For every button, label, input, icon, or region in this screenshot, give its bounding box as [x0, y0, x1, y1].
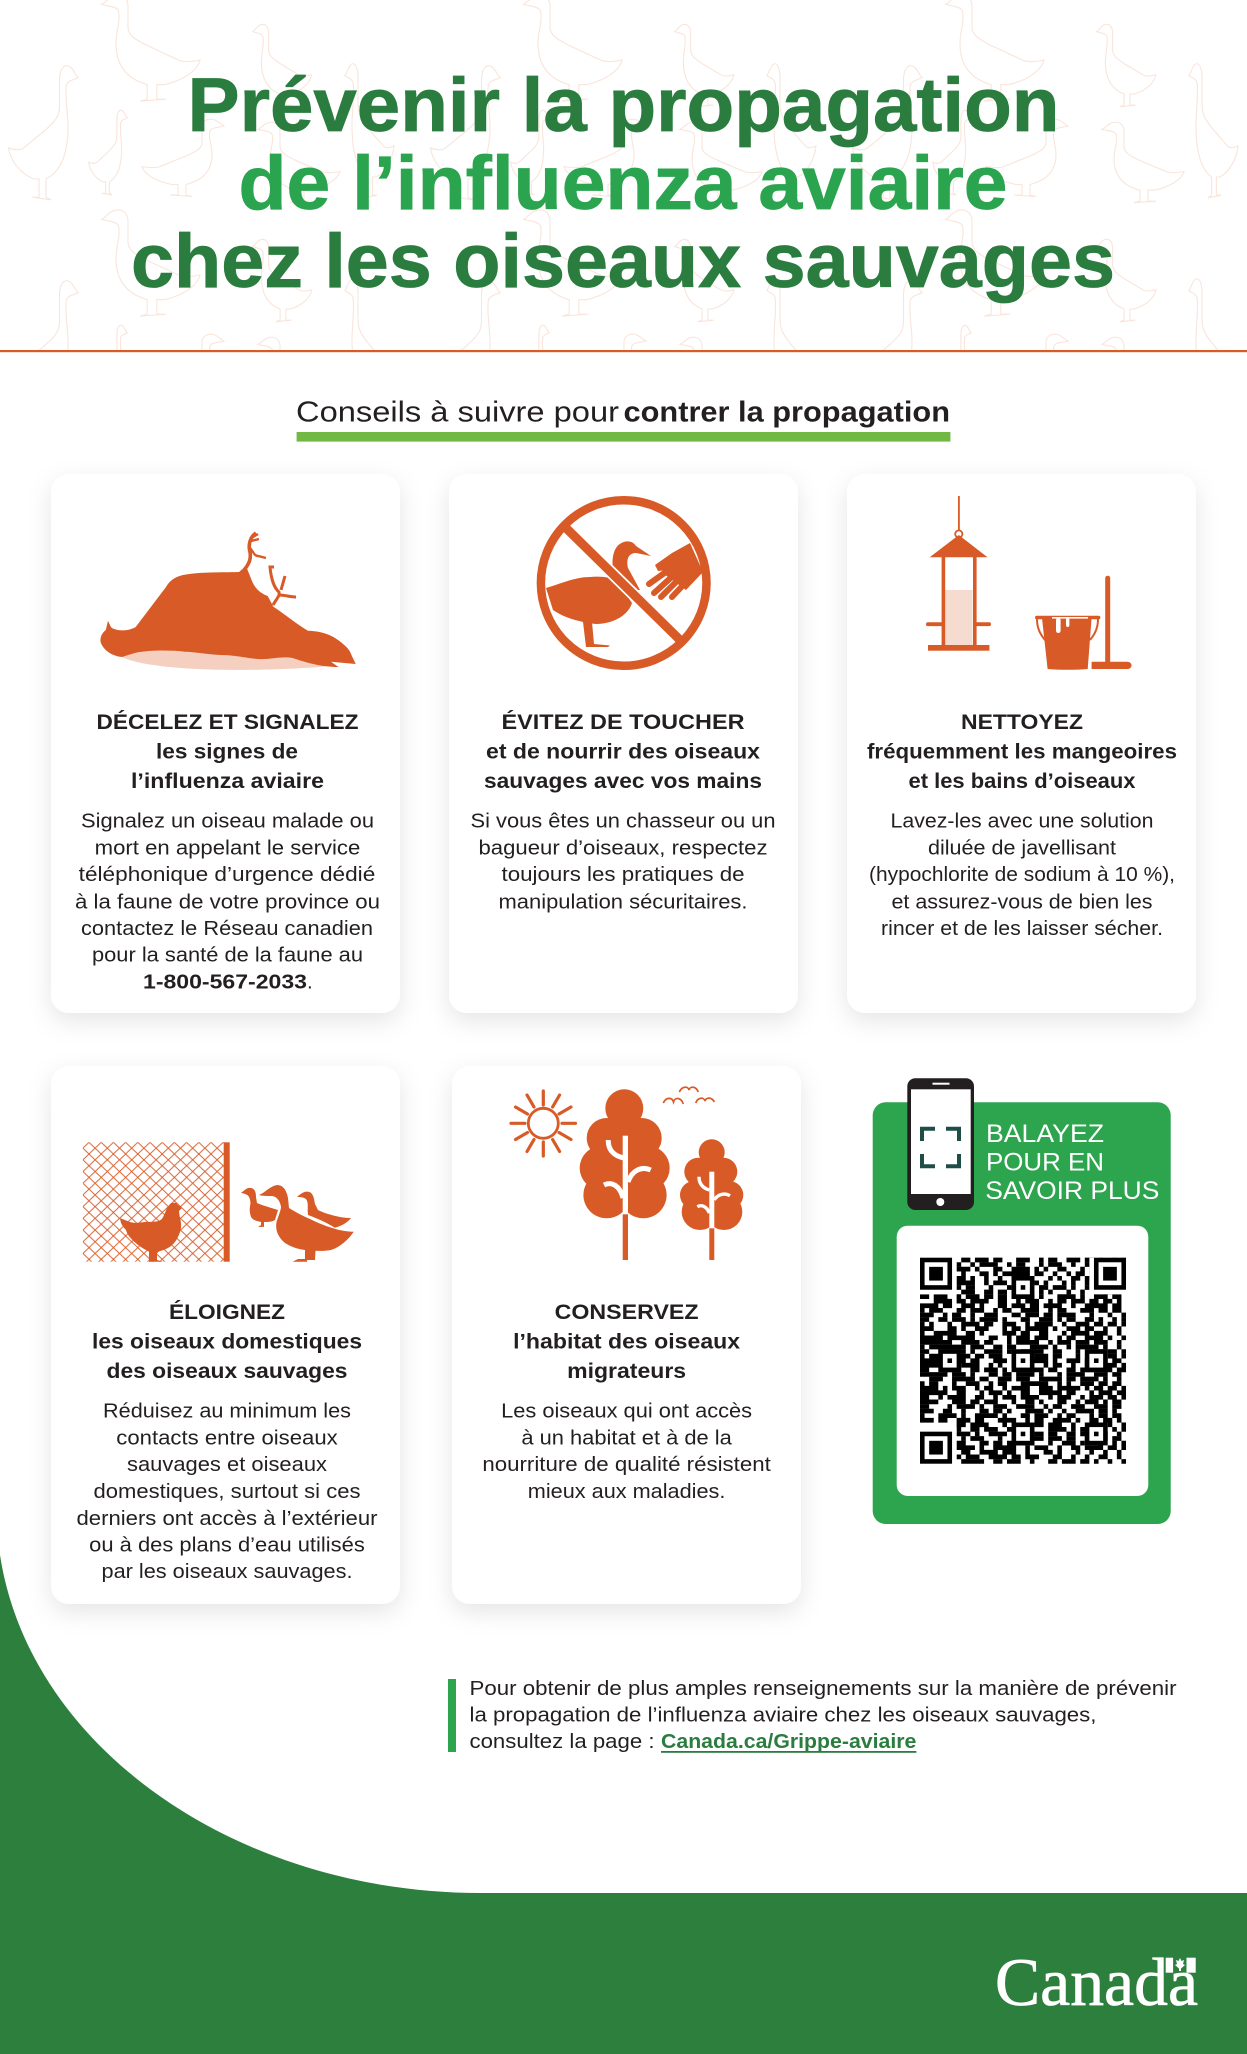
body text: décelez et signalez: .	[307, 970, 313, 993]
heading: éloignez	[92, 1299, 362, 1383]
icon: sun	[511, 1091, 576, 1156]
body text: éloignez: sauvages et oiseaux	[127, 1453, 328, 1476]
body text: éloignez: contacts entre oiseaux	[116, 1426, 339, 1449]
body text: évitez de toucher	[470, 810, 776, 913]
heading: évitez de toucher: ÉVITEZ DE TOUCHER	[502, 709, 745, 734]
heading: conservez: CONSERVEZ	[555, 1300, 699, 1324]
heading: éloignez: des oiseaux sauvages	[106, 1359, 348, 1383]
body text: éloignez: domestiques, surtout si ces	[94, 1480, 360, 1503]
body text: évitez de toucher: manipulation sécuritaires.	[498, 890, 748, 913]
section heading: Conseils à suivre pour	[296, 397, 619, 429]
call to action text	[985, 1120, 1159, 1205]
panel: conservez	[452, 1066, 801, 1604]
body text: éloignez: derniers ont accès à l’extérieur	[76, 1507, 378, 1530]
icon: phone scanner	[907, 1078, 974, 1210]
flag symbol	[1166, 1958, 1196, 1973]
body text: conservez: à un habitat et à de la	[521, 1426, 732, 1449]
heading: évitez de toucher: et de nourrir des oiseaux	[486, 740, 760, 764]
heading: évitez de toucher: sauvages avec vos mains	[484, 769, 762, 793]
body text: décelez et signalez: 1-800-567-2033	[143, 970, 307, 993]
heading: nettoyez: fréquemment les mangeoires	[867, 740, 1177, 764]
heading: décelez et signalez: l’influenza aviaire	[131, 769, 324, 793]
call to action text: BALAYEZ	[986, 1120, 1104, 1148]
header goose pattern background	[0, 0, 1238, 418]
heading: éloignez: les oiseaux domestiques	[92, 1330, 362, 1354]
title: Prévenir la propagation	[188, 63, 1060, 148]
title: de l’influenza aviaire	[238, 141, 1008, 226]
QR finder patterns	[920, 1258, 1126, 1464]
panel: éloignez	[51, 1066, 400, 1604]
body text: éloignez: ou à des plans d’eau utilisés	[89, 1534, 365, 1557]
body text: décelez et signalez: mort en appelant le service	[95, 836, 360, 859]
body text: conservez	[482, 1400, 771, 1503]
further information callout: la propagation de l’influenza aviaire chez les oiseaux sauvages,	[470, 1704, 1096, 1727]
heading: évitez de toucher	[484, 709, 762, 793]
icon: no touching bird	[541, 500, 706, 666]
body text: nettoyez: rincer et de les laisser sécher.	[881, 917, 1163, 940]
body text: conservez: Les oiseaux qui ont accès	[501, 1400, 752, 1423]
heading: décelez et signalez: DÉCELEZ ET SIGNALEZ	[96, 709, 358, 734]
panel: QR code call to action	[873, 1078, 1171, 1524]
icon: sun trees and birds	[511, 1087, 743, 1260]
panel: nettoyez	[847, 474, 1196, 1013]
heading: décelez et signalez	[96, 709, 358, 793]
heading: conservez: l’habitat des oiseaux	[513, 1330, 740, 1354]
heading: nettoyez	[867, 710, 1177, 793]
icon: dead bird	[100, 533, 356, 670]
call to action text: POUR EN	[986, 1149, 1104, 1177]
icon: flying birds	[663, 1087, 714, 1104]
body text: décelez et signalez: pour la santé de la faune au	[92, 944, 363, 967]
body text: éloignez	[76, 1400, 378, 1583]
body text: évitez de toucher: toujours les pratiques de	[502, 863, 744, 886]
body text: évitez de toucher: Si vous êtes un chasseur ou un	[470, 810, 776, 833]
section heading: contrer la propagation	[624, 397, 950, 429]
heading: décelez et signalez: les signes de	[156, 740, 298, 764]
heading: conservez: migrateurs	[567, 1359, 686, 1383]
footer band	[0, 1893, 1247, 2054]
further information callout	[448, 1677, 1177, 1753]
call to action text: SAVOIR PLUS	[985, 1177, 1159, 1205]
heading: nettoyez: NETTOYEZ	[961, 710, 1083, 734]
body text: décelez et signalez: contactez le Réseau canadien	[81, 917, 373, 940]
body text: nettoyez: diluée de javellisant	[928, 836, 1116, 859]
green curved corner	[0, 1555, 480, 1893]
header bottom rule	[0, 350, 1247, 352]
body text: décelez et signalez: téléphonique d’urgence dédié	[79, 863, 375, 886]
panel: évitez de toucher	[449, 474, 798, 1013]
further information callout: Canada.ca/Grippe-aviaire	[661, 1730, 916, 1753]
body text: conservez: nourriture de qualité résistent	[482, 1453, 771, 1476]
further information callout: Pour obtenir de plus amples renseignements sur la manière de prévenir	[470, 1677, 1177, 1700]
body text: évitez de toucher: bagueur d’oiseaux, respectez	[478, 836, 768, 859]
title: chez les oiseaux sauvages	[131, 219, 1115, 304]
body text: nettoyez	[869, 810, 1175, 940]
QR code	[920, 1258, 1126, 1464]
body text: éloignez: Réduisez au minimum les	[103, 1400, 351, 1423]
body text: décelez et signalez	[75, 810, 380, 993]
title	[131, 63, 1115, 304]
icon: bird feeder and bucket with mop	[926, 496, 1132, 670]
heading: éloignez: ÉLOIGNEZ	[169, 1299, 285, 1324]
further information callout: consultez la page :	[470, 1730, 654, 1753]
body text: nettoyez: (hypochlorite de sodium à 10 %),	[869, 863, 1175, 886]
section heading	[296, 397, 950, 442]
body text: décelez et signalez: à la faune de votre province ou	[75, 890, 380, 913]
body text: éloignez: par les oiseaux sauvages.	[102, 1560, 352, 1583]
heading: nettoyez: et les bains d’oiseaux	[908, 769, 1136, 793]
icon: hen behind fence and geese	[83, 1142, 354, 1262]
Canada wordmark: Canada	[995, 1944, 1198, 2020]
body text: conservez: mieux aux maladies.	[528, 1480, 725, 1503]
heading: conservez	[513, 1300, 740, 1383]
body text: nettoyez: et assurez-vous de bien les	[892, 890, 1152, 913]
panel: décelez et signalez	[51, 474, 400, 1013]
body text: décelez et signalez: Signalez un oiseau malade ou	[81, 810, 374, 833]
body text: nettoyez: Lavez-les avec une solution	[890, 810, 1154, 833]
